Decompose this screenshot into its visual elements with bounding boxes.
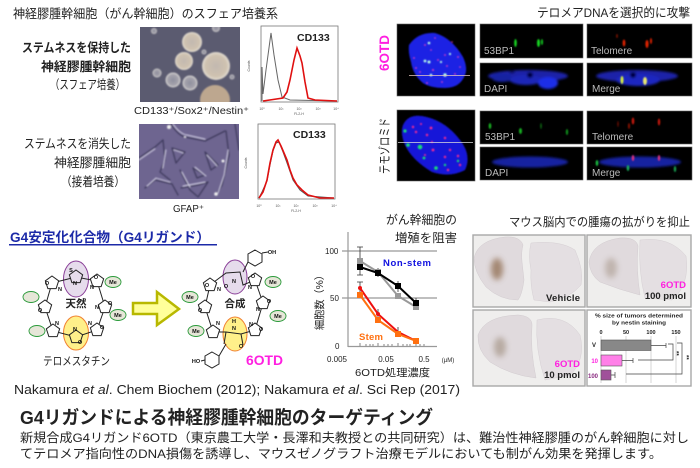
histogram: CD133 sphere: 10³ [315, 107, 321, 111]
green tags: 6OTD: Me [274, 314, 282, 320]
label: 6OTD compound: 6OTD [246, 353, 283, 368]
arrow [133, 292, 179, 325]
panel: DAPI temozolomide [480, 147, 583, 180]
bar chart: tumor size: 150 [671, 330, 681, 336]
panel: 53BP1 6OTD: 53BP1 [484, 46, 514, 57]
heading: G4 ligand: G4安定化化合物（G4リガンド） [10, 229, 210, 245]
histogram: CD133 adherent: 10² [293, 204, 299, 208]
axis tick labels: 100 [325, 247, 339, 256]
series label: Non-stem: Non-stem [383, 258, 431, 269]
structure: telomestatin: N [55, 321, 59, 327]
structure: 6OTD: O [267, 299, 272, 305]
green tags: 6OTD: Me [186, 295, 194, 301]
structure: telomestatin: O [108, 301, 113, 307]
heading: sphere culture: 神経膠腫幹細胞（がん幹細胞）のスフェア培養系 [13, 6, 278, 21]
structure: 6OTD: N [232, 326, 236, 332]
label: 6OTD 10 pmol [544, 359, 580, 381]
panel: Merge 6OTD: Merge [592, 84, 621, 95]
label: temozolomide row: テモゾロミド [378, 118, 392, 174]
structure: 6OTD: O [251, 274, 256, 280]
nucleus image: 6OTD [397, 24, 475, 96]
structure: 6OTD: N [256, 307, 260, 313]
panel: Merge 6OTD [587, 63, 692, 96]
label: synthetic: 合成 [224, 297, 246, 310]
axis tick labels [325, 247, 454, 364]
structure: telomestatin: N [73, 327, 77, 333]
structure: 6OTD: OH [268, 250, 276, 256]
axis tick labels: (µM) [442, 358, 454, 364]
bar chart: tumor size: ** [672, 351, 678, 356]
brain panel: 100 pmol [587, 235, 691, 307]
bar chart: tumor size: 0 [599, 330, 603, 336]
histogram: CD133 sphere: 10⁰ [259, 107, 265, 111]
structure: telomestatin: O [45, 281, 50, 287]
structure: 6OTD: O [239, 344, 244, 350]
label: stemness retained: ステムネスを保持した [22, 40, 131, 55]
structure: telomestatin: O [38, 308, 43, 314]
x-axis title: 6OTD処理濃度 [355, 366, 431, 379]
caption: adherent marker: GFAP⁺ [173, 204, 204, 215]
panel: Telomere temozolomide: Telomere [592, 132, 634, 143]
structure: telomestatin: O [94, 275, 99, 281]
histogram: CD133 sphere: 10⁴ [333, 107, 339, 111]
bar chart: tumor size: by nestin staining [612, 320, 667, 326]
histogram: CD133 sphere: CD133 [297, 32, 330, 44]
bar chart: tumor size: 10 [591, 359, 599, 365]
structure: telomestatin: O [78, 340, 83, 346]
panel: 53BP1 6OTD [480, 24, 583, 58]
structure: 6OTD [192, 250, 276, 368]
histogram: CD133 sphere: 10² [296, 107, 302, 111]
line chart: cell count [325, 232, 454, 364]
label: stemness lost: （接着培養） [61, 174, 125, 189]
label: 6OTD 10 pmol: 10 pmol [544, 370, 580, 381]
label: stemness retained: 神経膠腫幹細胞 [41, 59, 132, 74]
panel: Telomere temozolomide [587, 111, 692, 144]
description [20, 430, 689, 461]
bar chart: tumor size: 50 [623, 330, 629, 336]
label: Vehicle: Vehicle [546, 293, 580, 304]
heading: proliferation inhibited: がん幹細胞の [386, 212, 457, 227]
description: てテロメア指向性のDNA損傷を誘導し、マウスゼノグラフト治療モデルにおいても制がん効果を発揮します。 [20, 446, 662, 461]
green tags: 6OTD: Me [269, 280, 277, 286]
histogram: CD133 adherent: FL2-H [291, 209, 301, 213]
histogram: CD133 sphere: FL2-H [294, 112, 304, 116]
axis tick labels: 0.005 [327, 355, 348, 364]
structure: 6OTD: O [259, 327, 264, 333]
brain panel: 10 pmol [473, 310, 585, 386]
structure: 6OTD: N [232, 279, 236, 285]
label: stemness lost: ステムネスを消失した [24, 136, 131, 151]
heading: proliferation inhibited [386, 212, 457, 245]
label: stemness lost: 神経膠腫細胞 [54, 155, 131, 170]
axis tick labels: 0.5 [418, 355, 430, 364]
y-axis title: 細胞数（%） [313, 270, 326, 330]
description: 新規合成G4リガンド6OTD（東京農工大学・長澤和夫教授との共同研究）は、難治性神経膠腫のがん幹細胞に対し [20, 430, 689, 445]
structure: telomestatin: S [69, 268, 73, 274]
panel: Telomere 6OTD [587, 24, 692, 58]
panel: DAPI temozolomide: DAPI [485, 168, 508, 179]
structure: telomestatin: N [95, 305, 99, 311]
label: stemness retained: （スフェア培養） [50, 77, 125, 92]
structure: 6OTD: N [216, 321, 220, 327]
structure: telomestatin: O [100, 325, 105, 331]
label: stemness lost [24, 136, 131, 189]
green tags: 6OTD [182, 276, 286, 336]
panel: DAPI 6OTD: DAPI [484, 84, 507, 95]
photo: sphere cells [140, 27, 240, 102]
bar chart: tumor size: 100 [588, 374, 599, 380]
histogram: CD133 adherent: 10⁰ [256, 204, 262, 208]
structure: 6OTD: O [198, 308, 203, 314]
heading: suppress spread in mouse brain: マウス脳内での腫瘍の拡がりを抑止 [509, 214, 690, 229]
nucleus image: temozolomide [397, 110, 475, 181]
bar chart: tumor size [587, 310, 691, 386]
panel: Telomere 6OTD: Telomere [591, 46, 633, 57]
structure: 6OTD: O [224, 284, 229, 290]
histogram: CD133 adherent: 10¹ [275, 204, 281, 208]
label: 6OTD 100 pmol: 6OTD [661, 280, 686, 291]
bar chart: tumor size: V [592, 343, 596, 349]
structure: telomestatin: N [88, 321, 92, 327]
structure: 6OTD: N [248, 285, 252, 291]
photo: adherent cells [139, 124, 239, 199]
axis tick labels: 50 [330, 294, 339, 303]
label: telomestatin: テロメスタチン [43, 355, 110, 368]
structure: telomestatin [38, 261, 113, 350]
heading: telomere attack: テロメアDNAを選択的に攻撃 [537, 5, 690, 20]
green tags: 6OTD: Me [192, 329, 200, 335]
panel: Merge temozolomide [587, 147, 692, 180]
structure: 6OTD: H [232, 319, 236, 325]
histogram: CD133 sphere [247, 26, 339, 116]
structure: 6OTD: N [217, 287, 221, 293]
green tags: telomestatin: Me [109, 280, 117, 286]
label: 6OTD 100 pmol [645, 280, 686, 302]
axis tick labels: 0.05 [378, 355, 394, 364]
structure: 6OTD: HO [192, 359, 201, 365]
caption: sphere markers: CD133⁺/Sox2⁺/Nestin⁺ [134, 106, 249, 117]
panel: 53BP1 temozolomide: 53BP1 [485, 132, 515, 143]
structure: 6OTD: O [205, 283, 210, 289]
histogram: CD133 adherent [244, 124, 337, 213]
series label: Stem: Stem [359, 332, 383, 343]
green tags: telomestatin [23, 276, 126, 336]
panel: 53BP1 temozolomide [480, 111, 583, 144]
panel: Merge temozolomide: Merge [592, 168, 621, 179]
label: stemness retained [22, 40, 132, 92]
main title: G4リガンドによる神経膠腫幹細胞のターゲティング [20, 407, 433, 428]
structure: 6OTD: N [249, 322, 253, 328]
histogram: CD133 sphere: 10¹ [278, 107, 284, 111]
panel: DAPI 6OTD [480, 63, 583, 96]
histogram: CD133 adherent: Counts [244, 157, 248, 169]
citation: Nakamura et al. Chem Biochem (2012); Nakamura et al. Sci Rep (2017) [14, 383, 460, 397]
label: 6OTD 100 pmol: 100 pmol [645, 291, 686, 302]
histogram: CD133 adherent: CD133 [293, 129, 326, 141]
bar chart: tumor size: ** [682, 355, 688, 360]
axis tick labels: 0 [335, 342, 340, 351]
brain panel: Vehicle [473, 235, 585, 307]
histogram: CD133 adherent: 10³ [312, 204, 318, 208]
histogram: CD133 sphere: Counts [247, 60, 251, 72]
label: 6OTD row: 6OTD [377, 35, 392, 71]
bar chart: tumor size: % size of tumors determined [595, 314, 684, 320]
structure: telomestatin: N [73, 281, 77, 287]
bar chart: tumor size: 100 [646, 330, 656, 336]
label: natural: 天然 [66, 297, 87, 310]
label: 6OTD 10 pmol: 6OTD [555, 359, 580, 370]
heading: proliferation inhibited: 増殖を阻害 [395, 230, 457, 245]
histogram: CD133 adherent: 10⁴ [331, 204, 337, 208]
structure: telomestatin: N [90, 285, 94, 291]
green tags: telomestatin: Me [114, 313, 122, 319]
structure: telomestatin: N [58, 287, 62, 293]
